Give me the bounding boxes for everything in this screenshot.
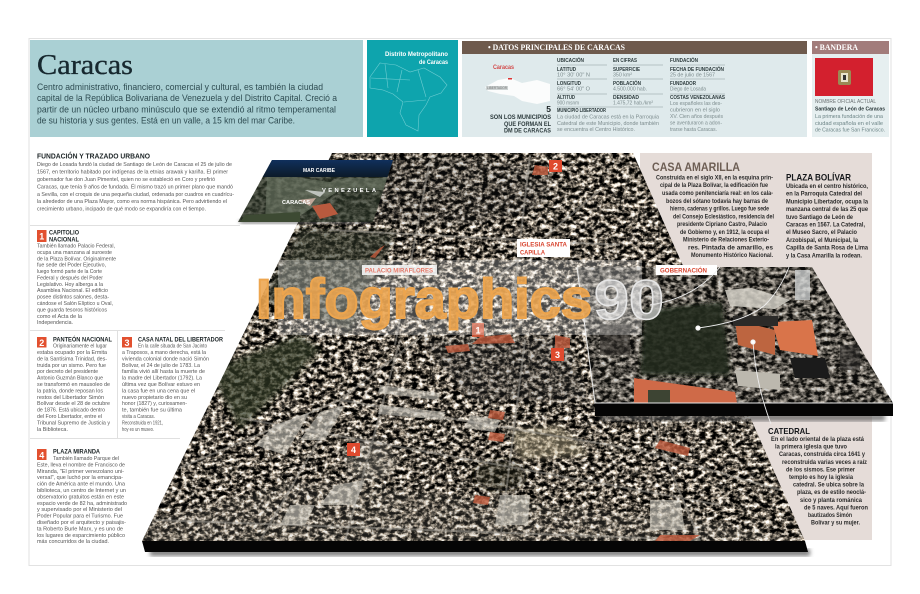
text block: 1 Capitolio Nacional: como el Acta de la: [37, 314, 83, 320]
text block: Catedral: En el lado oriental de la plaza está: [771, 437, 865, 443]
text block: foundation and urban layout: la alrededor de una Plaza Mayor, como era norma hispánica. Pero advirtiendo el: [37, 199, 227, 205]
column: foundation: COSTAS VENEZOLANAS: [670, 95, 725, 101]
column: foundation: FUNDACIÓN: [670, 56, 698, 64]
text block: foundation and urban layout: Diego de Losada fundó la ciudad de Santiago de León de Caracas el 25 de julio de: [37, 162, 232, 168]
column: foundation: [670, 56, 725, 133]
text block: 1 Capitolio Nacional: posee distintos salones, desta-: [37, 295, 109, 301]
panel: metropolitan district map: Distrito Metropolitano: [385, 51, 448, 58]
column: foundation: cubrieron en el siglo: [670, 108, 720, 114]
column: location: ALTITUD: [557, 95, 575, 101]
municipalities count: [490, 104, 551, 134]
map thickness: [142, 541, 808, 552]
column: foundation: se aventuraron a adon-: [670, 120, 722, 126]
text block: 3 Casa Natal del Libertador: En la calle situada de San Jacinto: [138, 344, 207, 350]
column: foundation: XV. Cien años después: [670, 114, 723, 120]
column: figures: SUPERFICIE: [613, 67, 640, 73]
column: foundation: 25 de julio de 1567: [670, 72, 715, 78]
data heading: [462, 41, 807, 54]
text block: Casa Amarilla: [652, 162, 774, 259]
text block: 2 Panteón Nacional: truida por un sismo. Pero fue: [37, 363, 106, 369]
text block: Casa Amarilla: hierro, cadenas y grillos. Luego fue sede: [670, 206, 770, 212]
text block: Catedral: de los sismos. Ese primer: [786, 467, 856, 473]
map shadow: [150, 549, 810, 556]
light building blocks: [255, 385, 685, 530]
icon: Caracas flag: [815, 58, 873, 96]
text block: 3 Casa Natal del Libertador: la madre del Libertador (1792). La: [122, 376, 203, 382]
dark courtyard: [790, 358, 830, 378]
text block: 3 Casa Natal del Libertador: a Traposos, a mano derecha, está la: [122, 350, 207, 356]
text block: 2 Panteón Nacional: Originariamente el lugar: [53, 344, 107, 350]
watermark: [256, 260, 664, 335]
watermark: 90: [594, 268, 664, 331]
text block: 3 Casa Natal del Libertador: CASA NATAL DEL LIBERTADOR: [138, 336, 223, 344]
text block: 2 Panteón Nacional: la patria, donde reposan los: [37, 388, 103, 394]
text block: Plaza Bolívar: manzana central de las 25 que: [786, 207, 869, 213]
map marker 1: [472, 323, 484, 337]
inset: Plaza Bolívar detail: [570, 262, 900, 421]
text block: 1 Capitolio Nacional: que guarda tesoros históricos: [37, 307, 107, 313]
text block: 2 Panteón Nacional: por decreto del presidente: [37, 369, 98, 375]
text block: 3 Casa Natal del Libertador: hoy es un museo.: [122, 427, 154, 433]
municipalities count: QUE FORMAN EL: [504, 122, 551, 128]
text block: 1 Capitolio Nacional: También llamado Palacio Federal,: [37, 244, 115, 250]
municipio libertador note: Catedral de este Municipio, donde también: [557, 121, 659, 127]
text block: Plaza Bolívar: PLAZA BOLÍVAR: [786, 172, 852, 182]
panel: main data: [462, 41, 807, 137]
panel: beige background for callouts: [640, 153, 872, 540]
text block: Catedral: sico y planta románica: [800, 498, 863, 504]
text block: 4 Plaza Miranda: Poder Popular para el Turismo. Fue: [37, 514, 123, 520]
text block: foundation and urban layout: FUNDACIÓN Y TRAZADO URBANO: [37, 152, 150, 160]
text block: 4 Plaza Miranda: los lugares de esparcimiento público: [37, 533, 125, 539]
column: figures: EN CIFRAS: [613, 58, 637, 64]
orange roofs: [370, 165, 700, 541]
text block: 2 Panteón Nacional: estaba ocupado por la Ermita: [37, 350, 108, 356]
white building: [725, 288, 790, 309]
column: figures: POBLACIÓN: [613, 79, 641, 87]
callout lines: [650, 267, 789, 424]
inset: Venezuela location: VENEZUELA: [322, 188, 377, 194]
introduction text: de su historia y sus gentes. Está en un valle, a 15 km del mar Caribe.: [37, 116, 295, 126]
column: location: LATITUD: [557, 67, 576, 73]
inset: Venezuela location: MAR CARIBE: [303, 168, 335, 174]
inset: Venezuela location: [235, 158, 400, 224]
icon: number 4: 4: [39, 450, 44, 460]
inset shadow: [600, 414, 885, 421]
text block: 1 Capitolio Nacional: luego formó parte de la Corte: [37, 269, 102, 275]
text block: 3 Casa Natal del Libertador: familia vivió allí hasta la muerte de: [122, 369, 205, 375]
watermark: Infographics: [256, 267, 592, 330]
column: foundation: Los españoles las des-: [670, 101, 722, 107]
column: location: LONGITUD: [557, 81, 581, 87]
text block: 3 Casa Natal del Libertador: honor (1827) y, curiosamen-: [122, 401, 187, 407]
text block: 4 Plaza Miranda: diseñado por el arquitecto y paisajis-: [37, 520, 126, 526]
text block: 2 Panteón Nacional: la Biblioteca.: [37, 427, 68, 433]
aerial map of Caracas: [140, 150, 810, 556]
municipio libertador note: [557, 108, 659, 133]
introduction text: Centro administrativo, financiero, comercial y cultural, es también la ciudad: [37, 82, 323, 92]
flag note: ciudad española en el valle: [815, 121, 883, 127]
text block: Plaza Bolívar: el Museo Sacro, el Palacio: [786, 230, 857, 236]
text block: 2 Panteón Nacional: del Foro Libertador, entre el: [37, 414, 102, 420]
text block: 3 Casa Natal del Libertador: te, también fue su última: [122, 408, 183, 414]
text block: Casa Amarilla: Construida en el siglo XII, en la esquina prin-: [656, 176, 773, 182]
municipio libertador note: La ciudad de Caracas está en la Parroquia: [557, 114, 659, 120]
text block: Plaza Bolívar: Caracas en 1567. La Catedral,: [786, 222, 865, 228]
text block: Plaza Bolívar: [786, 172, 869, 259]
text block: Plaza Bolívar: y la Casa Amarilla la rodean.: [786, 253, 862, 259]
text block: Catedral: bautizados Simón: [808, 513, 852, 519]
text block: 2 Panteón Nacional: restos del Libertador Simón: [37, 395, 104, 401]
column: location: 900 msnm: [557, 100, 579, 106]
introduction text: capital de la República Bolivariana de Venezuela y del Distrito Capital. Creció a: [37, 93, 338, 103]
text block: foundation and urban layout: Caracas, que tenía 9 años de fundada. Él mismo trazó un primer plano que mandó: [37, 183, 233, 190]
text block: Casa Amarilla: Ministerio de Relaciones Exterio-: [683, 238, 769, 244]
text block: 1 Capitolio Nacional: Asamblea Nacional. El edificio: [37, 288, 108, 294]
text block: 3 Casa Natal del Libertador: vivienda colonial donde nació Simón: [122, 356, 209, 362]
text block: Catedral: de 5 naves. Aquí fueron: [804, 505, 868, 511]
introduction text: partir de un núcleo urbano minúsculo que se extendió al ritmo temperamental: [37, 104, 336, 114]
text block: 2 Panteón Nacional: se transformó en mausoleo de: [37, 382, 110, 388]
text block: 1 Capitolio Nacional: [37, 230, 116, 326]
text block: foundation and urban layout: [37, 152, 234, 212]
text block: 3 Casa Natal del Libertador: visita a Caracas.: [122, 414, 155, 420]
text block: 3 Casa Natal del Libertador: [122, 336, 223, 433]
avenues: [155, 155, 780, 541]
map marker 4: [347, 443, 360, 456]
label: Gobernación: [656, 265, 717, 275]
text block: 2 Panteón Nacional: Bolívar desde el 28 de octubre: [37, 401, 110, 407]
text block: 1 Capitolio Nacional: CAPITOLIO: [49, 230, 79, 236]
label: Iglesia Santa Capilla: CAPILLA: [520, 250, 545, 256]
flag note: Santiago de León de Caracas: [815, 106, 885, 112]
text block: 4 Plaza Miranda: Miranda, "El primer venezolano uni-: [37, 469, 124, 475]
icon: number 1: 1: [39, 232, 44, 242]
introduction text: [37, 82, 338, 126]
text block: 4 Plaza Miranda: biblioteca, un centro de Internet y un: [37, 488, 126, 494]
municipalities count: DM DE CARACAS: [504, 128, 551, 134]
map marker 3: [551, 348, 564, 361]
text block: Plaza Bolívar: Ubicada en el centro histórico,: [786, 184, 868, 190]
text block: 1 Capitolio Nacional: Independencia.: [37, 320, 73, 326]
inset white edge: [577, 267, 893, 403]
text block: 2 Panteón Nacional: de la Santísima Trinidad, des-: [37, 356, 107, 362]
text block: 4 Plaza Miranda: PLAZA MIRANDA: [53, 448, 100, 456]
map marker 2: [549, 160, 562, 172]
text block: 4 Plaza Miranda: ta Roberto Burle Marx, y es uno de: [37, 526, 123, 532]
text block: 1 Capitolio Nacional: de la Plaza Bolívar. Originalmente: [37, 256, 116, 262]
text block: Casa Amarilla: bozos del sótano todavía hay barras de: [666, 199, 769, 205]
pale blocks: [600, 325, 630, 355]
column: foundation: trarse hasta Caracas.: [670, 127, 717, 133]
low-frequency zones: [140, 155, 800, 545]
flag note: NOMBRE OFICIAL ACTUAL: [815, 99, 876, 105]
map marker 4: 4: [351, 445, 356, 455]
text block: 4 Plaza Miranda: y supervisado por el Ministerio del: [37, 507, 122, 513]
text block: 1 Capitolio Nacional: NACIONAL: [49, 236, 79, 244]
municipio libertador note: MUNICIPIO LIBERTADOR: [557, 108, 606, 114]
casa amarilla building: [736, 326, 775, 355]
plaza trees: [640, 302, 730, 375]
text block: Catedral: la primera iglesia que tuvo: [775, 445, 847, 451]
text block: 4 Plaza Miranda: También llamado Parque del: [53, 456, 119, 462]
text block: 4 Plaza Miranda: más concurridos de la ciudad.: [37, 539, 109, 545]
text block: Catedral: templo es hoy la iglesia: [789, 475, 854, 481]
text block: Catedral: reconstruida varias veces a raíz: [782, 460, 867, 466]
south orange building: [634, 378, 737, 403]
text block: 4 Plaza Miranda: [37, 448, 127, 545]
text block: 4 Plaza Miranda: espacio verde de 82 ha, administrado: [37, 501, 127, 507]
text block: 4 Plaza Miranda: ción de América ante el mundo. Una: [37, 482, 126, 488]
text block: foundation and urban layout: a Sevilla, con el croquis de una pequeña ciudad, ordenada por cuadros en cuadrícu-: [37, 192, 234, 198]
flag heading: • BANDERA: [815, 43, 858, 52]
locator map: LIBERTADOR: [487, 86, 508, 90]
text block: Catedral: Caracas, construida circa 1641 y: [779, 452, 866, 458]
text block: Casa Amarilla: CASA AMARILLA: [652, 162, 740, 174]
inset thickness: [595, 403, 893, 416]
text block: 1 Capitolio Nacional: cándose el Salón Elíptico u Oval,: [37, 301, 113, 307]
column: figures: 350 km²: [613, 72, 632, 78]
panel: metropolitan district map: de Caracas: [419, 59, 448, 66]
flag note: de Caracas fue San Francisco.: [815, 128, 885, 134]
text block: Catedral: Bolívar y su mujer.: [811, 521, 860, 527]
text block: 1 Capitolio Nacional: Federal y después del Poder: [37, 275, 103, 281]
text block: 2 Panteón Nacional: [37, 334, 112, 433]
mountain slope: [265, 177, 387, 216]
column: figures: 1.475,72 hab./km²: [613, 100, 653, 106]
inset: Venezuela location: CARACAS: [282, 200, 310, 206]
text block: 4 Plaza Miranda: versal", que luchó por la emancipa-: [37, 475, 123, 481]
column: location: 66° 54' 00" O: [557, 86, 590, 92]
icon: number 3: 3: [124, 338, 130, 348]
column: foundation: Diego de Losada: [670, 86, 706, 92]
text block: Catedral: catedral. Se ubica sobre la: [793, 483, 865, 489]
column: foundation: FUNDADOR: [670, 81, 696, 87]
text block: 3 Casa Natal del Libertador: Reconstruida en 1921,: [122, 420, 163, 426]
label: Palacio Miraflores: [362, 265, 437, 275]
flag note: La primera fundación de una: [815, 114, 883, 120]
text block: 1 Capitolio Nacional: fue sede del Poder Ejecutivo,: [37, 263, 106, 269]
text block: Casa Amarilla: presidente Cipriano Castro, Palacio: [677, 222, 767, 228]
column: figures: [613, 58, 663, 106]
map marker 1: 1: [475, 326, 481, 336]
data heading: • DATOS PRINCIPALES DE CARACAS: [488, 43, 626, 52]
urban Caracas patch: [312, 203, 338, 219]
icon: Venezuela outline: [370, 63, 447, 131]
text block: 2 Panteón Nacional: Tribunal Supremo de Justicia y: [37, 420, 110, 426]
column: figures: 4.500.000 hab.: [613, 86, 647, 92]
text block: 2 Panteón Nacional: Antonio Guzmán Blanco que: [37, 376, 103, 382]
title: Caracas: [37, 49, 133, 81]
text block: Casa Amarilla: usada como penitenciaría real: en los cala-: [662, 191, 773, 197]
column: location: [557, 56, 663, 107]
text block: Casa Amarilla: Monumento Histórico Nacional.: [691, 253, 773, 259]
text block: Plaza Bolívar: Municipio Libertador, ocupa la: [786, 199, 869, 205]
column: location: 10° 30' 00" N: [557, 72, 590, 78]
label: Gobernación: GOBERNACIÓN: [660, 266, 707, 275]
text block: Catedral: plaza, es de estilo neoclá-: [797, 490, 866, 496]
column: figures: DENSIDAD: [613, 95, 639, 101]
municipio libertador note: se encuentra el Centro Histórico.: [557, 127, 635, 133]
label: Iglesia Santa Capilla: [517, 239, 570, 257]
locator map: Caracas: [493, 64, 514, 71]
text block: Plaza Bolívar: tuvo Santiago de León de: [786, 215, 854, 221]
text block: Plaza Bolívar: Arzobispal, el Municipal, la: [786, 238, 859, 244]
text block: 4 Plaza Miranda: Este, lleva el nombre de Francisco de: [37, 462, 125, 468]
text block: Catedral: CATEDRAL: [768, 426, 810, 436]
text block: Casa Amarilla: cipal de la Plaza Bolívar, la edificación fue: [660, 183, 769, 189]
text block: foundation and urban layout: 1567, en territorio habitado por indígenas de la etnias arawak y kariña. El primer: [37, 170, 228, 176]
text block: 2 Panteón Nacional: PANTEÓN NACIONAL: [53, 334, 112, 344]
text block: 1 Capitolio Nacional: Legislativo. Hoy alberga a la: [37, 282, 104, 288]
text block: 3 Casa Natal del Libertador: la casa fue en una cena que el: [122, 388, 195, 394]
icon: number 2: 2: [39, 338, 44, 348]
text block: 4 Plaza Miranda: observatorio gratuitos están en este: [37, 494, 124, 500]
text block: foundation and urban layout: crecimiento urbano, incipado de qué modo se expandiría con el tiempo.: [37, 206, 206, 212]
label: Iglesia Santa Capilla: IGLESIA SANTA: [520, 242, 567, 248]
panel: title and introduction: [30, 40, 363, 137]
text block: Plaza Bolívar: Capilla de Santa Rosa de Lima: [786, 246, 869, 252]
column: foundation: FECHA DE FUNDACIÓN: [670, 65, 724, 73]
text block: Catedral: [768, 426, 868, 527]
text block: Casa Amarilla: del Consejo Eclesiástico, residencia del: [673, 214, 774, 220]
column: location: UBICACIÓN: [557, 56, 584, 64]
text block: Plaza Bolívar: en la Parroquia Catedral del: [786, 192, 862, 198]
text block: 1 Capitolio Nacional: ocupa una manzana al suroeste: [37, 250, 112, 256]
text block: foundation and urban layout: gobernador fue don Juan Pimentel, quien no se estableció en Coro y prefirió: [37, 177, 215, 183]
locator map: [485, 64, 550, 104]
map marker 2: 2: [553, 162, 558, 172]
text block: 3 Casa Natal del Libertador: última vez que Bolívar estuvo en: [122, 382, 200, 388]
text block: 3 Casa Natal del Libertador: Bolívar, el 24 de julio de 1783. La: [122, 363, 201, 369]
municipalities count: 5: [546, 104, 551, 114]
text block: 3 Casa Natal del Libertador: nuevo propietario dio en su: [122, 395, 187, 401]
text block: 2 Panteón Nacional: de 1876. Está ubicado dentro: [37, 408, 105, 414]
municipalities count: SON LOS MUNICIPIOS: [490, 115, 551, 121]
panel: metropolitan district map: [367, 40, 458, 137]
map marker 3: 3: [555, 350, 560, 360]
text block: Casa Amarilla: res. Pintada de amarillo, es: [688, 245, 774, 251]
flag note: [815, 99, 885, 134]
text block: Casa Amarilla: de Gobierno y, en 1912, la ocupa el: [680, 230, 769, 236]
label: Palacio Miraflores: PALACIO MIRAFLORES: [365, 268, 433, 274]
panel: flag: [812, 41, 889, 137]
